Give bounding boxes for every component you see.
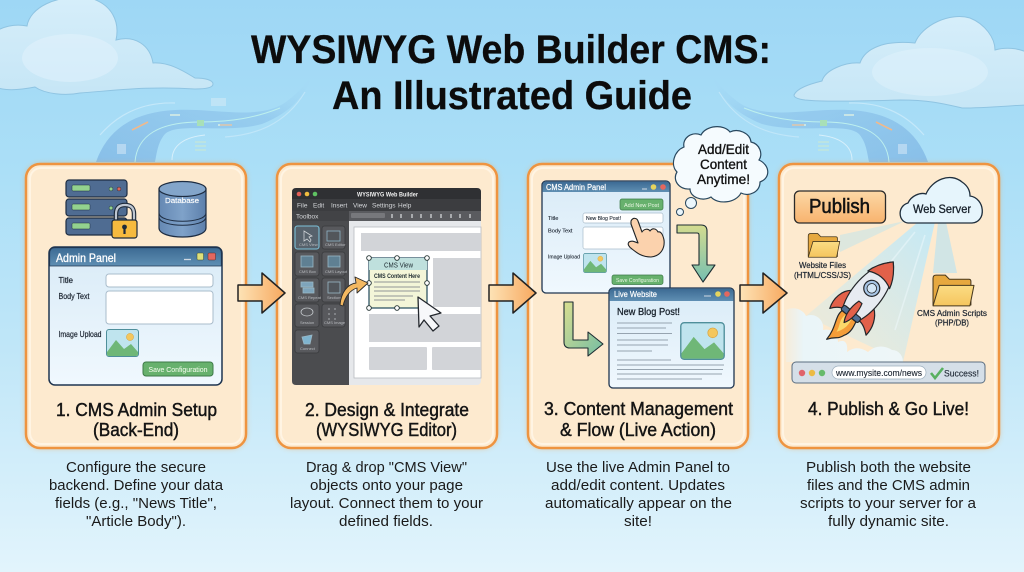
folder: website files: Website Files xyxy=(799,261,846,270)
CMS admin window xyxy=(542,181,670,293)
description 3: site! xyxy=(624,513,652,530)
description 1: backend. Define your data xyxy=(49,477,224,494)
editor window: Insert xyxy=(331,202,347,210)
left data ribbon xyxy=(96,74,313,162)
right data ribbon xyxy=(711,74,928,162)
admin panel window: Image Upload xyxy=(58,329,102,339)
web server cloud xyxy=(900,178,982,223)
folder: CMS admin scripts: CMS Admin Scripts xyxy=(917,309,987,318)
heading 3: & Flow (Live Action) xyxy=(560,419,716,440)
toolbox labels: CMS Box xyxy=(299,269,316,274)
heading 2: (WYSIWYG Editor) xyxy=(316,419,457,440)
description 1: Configure the secure xyxy=(66,459,206,476)
folder: CMS admin scripts: (PHP/DB) xyxy=(935,318,969,328)
CMS admin window: Title xyxy=(548,216,558,222)
left sky cloud xyxy=(0,0,213,94)
CMS admin window: CMS Admin Panel xyxy=(546,183,606,192)
CMS view widget: CMS Content Here xyxy=(374,273,420,280)
panel 3: content management xyxy=(528,164,748,448)
description 3: add/edit content. Updates xyxy=(551,477,725,494)
folder: website files: (HTML/CSS/JS) xyxy=(794,271,851,280)
admin panel window: Title xyxy=(58,275,73,285)
description 1: fields (e.g., "News Title", xyxy=(55,495,217,512)
title: WYSIWYG Web Builder CMS: xyxy=(251,28,771,72)
mouse cursor xyxy=(418,297,441,331)
description 2: layout. Connect them to your xyxy=(290,495,483,512)
CMS admin window: Body Text xyxy=(548,228,573,234)
light rays xyxy=(806,221,957,362)
folder: CMS admin scripts xyxy=(917,275,987,328)
description 1 xyxy=(49,459,224,530)
heading 3 xyxy=(544,398,733,440)
icon: pointing hand xyxy=(628,218,664,257)
heading 1: 1. CMS Admin Setup xyxy=(56,399,217,420)
admin panel window: Save Configuration xyxy=(148,365,208,374)
live website window: New Blog Post! xyxy=(617,306,680,318)
panel 1: CMS admin setup xyxy=(26,164,246,448)
editor window: Edit xyxy=(313,202,324,210)
browser success bar: www.mysite.com/news xyxy=(835,368,922,378)
CMS admin window: Add New Post xyxy=(624,203,659,209)
panel 2: design and integrate xyxy=(277,164,497,448)
thought bubble: Add/Edit xyxy=(698,141,749,157)
web server cloud: Web Server xyxy=(913,204,971,216)
green arrow: lower flow xyxy=(564,302,603,356)
title: An Illustrated Guide xyxy=(332,74,692,118)
toolbox labels: CMS View xyxy=(299,242,318,247)
thought bubble: Anytime! xyxy=(697,171,750,187)
browser success bar xyxy=(792,362,985,383)
arrow: step 1 to 2 xyxy=(238,273,285,313)
description 1: "Article Body"). xyxy=(86,513,186,530)
CMS view widget: CMS View xyxy=(384,262,414,270)
description 2: objects onto your page xyxy=(310,477,463,494)
toolbox labels: CMS Image xyxy=(324,320,346,325)
heading 1 xyxy=(56,399,217,440)
CMS view widget xyxy=(367,256,429,310)
browser success bar: Success! xyxy=(944,368,979,378)
editor window: File xyxy=(297,202,308,210)
editor window xyxy=(292,188,481,385)
icon: database xyxy=(159,182,206,237)
toolbox labels: Connect xyxy=(300,346,316,351)
toolbox buttons xyxy=(295,226,345,353)
description 4 xyxy=(800,459,977,530)
CMS admin window: New Blog Post! xyxy=(586,216,621,222)
toolbox labels: CMS Layout xyxy=(325,269,348,274)
toolbox labels: Sections xyxy=(327,295,342,300)
title xyxy=(251,28,771,118)
publish button xyxy=(794,191,886,223)
curved orange arrow xyxy=(340,277,368,306)
toolbox labels xyxy=(298,242,348,351)
icon: server stack xyxy=(66,180,127,235)
heading 3: 3. Content Management xyxy=(544,398,733,419)
thought bubble: Content xyxy=(700,156,747,172)
icon: padlock xyxy=(112,205,137,238)
description 3 xyxy=(545,459,732,530)
live website window: Live Website xyxy=(614,289,657,299)
heading 1: (Back-End) xyxy=(93,419,179,440)
toolbox labels: Session xyxy=(300,320,314,325)
smoke clouds xyxy=(786,308,903,362)
description 4: fully dynamic site. xyxy=(828,513,949,530)
description 4: Publish both the website xyxy=(806,459,971,476)
description 3: Use the live Admin Panel to xyxy=(546,459,730,476)
description 4: scripts to your server for a xyxy=(800,495,977,512)
CMS admin window: Image Upload xyxy=(548,254,580,260)
panel 4: publish and go live xyxy=(779,164,999,448)
folder: website files xyxy=(794,234,851,280)
icon: rocket xyxy=(812,248,913,357)
editor window: Toolbox xyxy=(296,214,319,220)
thought bubble xyxy=(673,127,768,216)
live website window xyxy=(609,288,734,388)
description 4: files and the CMS admin xyxy=(807,477,970,494)
editor window: WYSIWYG Web Builder xyxy=(357,192,418,198)
toolbox labels: CMS Repeat xyxy=(298,295,322,300)
arrow: step 2 to 3 xyxy=(489,273,536,313)
admin panel window: Body Text xyxy=(58,291,90,301)
description 2: Drag & drop "CMS View" xyxy=(306,459,467,476)
description 2 xyxy=(290,459,483,530)
icon: database: Database xyxy=(165,196,199,205)
admin panel window: Admin Panel xyxy=(56,251,116,265)
description 3: automatically appear on the xyxy=(545,495,732,512)
green arrow: admin to live xyxy=(677,225,715,282)
CMS admin window: Save Configuration xyxy=(616,278,659,284)
right sky cloud xyxy=(794,17,1024,108)
heading 2 xyxy=(305,399,469,440)
description 2: defined fields. xyxy=(339,513,433,530)
publish button: Publish xyxy=(809,196,870,218)
toolbox labels: CMS Editor xyxy=(325,242,346,247)
editor window: Settings xyxy=(372,202,396,210)
arrow: step 3 to 4 xyxy=(740,273,787,313)
heading 2: 2. Design & Integrate xyxy=(305,399,469,420)
heading 4: 4. Publish & Go Live! xyxy=(808,398,969,419)
admin panel window xyxy=(49,247,222,385)
editor window: View xyxy=(353,202,367,210)
editor window: Help xyxy=(398,202,412,210)
